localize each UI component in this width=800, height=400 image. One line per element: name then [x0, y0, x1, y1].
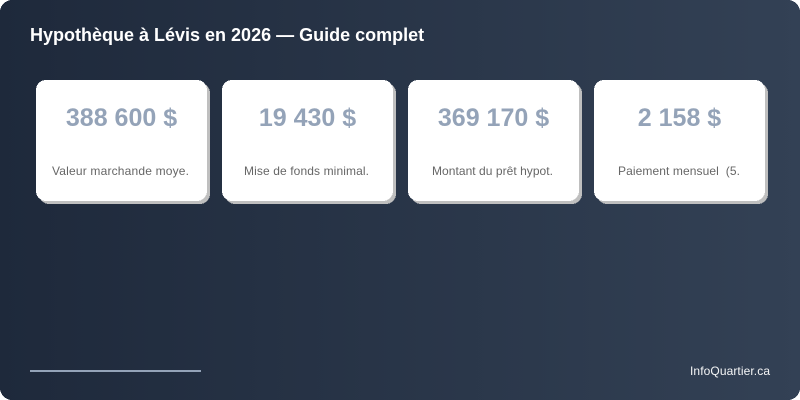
label: valeur marchande: Valeur marchande moye.	[52, 164, 189, 178]
stat: paiement mensuel: 2 158 $	[638, 104, 721, 132]
stat: valeur marchande: 388 600 $	[66, 104, 177, 132]
label: montant du prêt: Montant du prêt hypot.	[432, 164, 553, 178]
panel: mise de fonds	[222, 80, 396, 204]
label: mise de fonds: Mise de fonds minimal.	[244, 164, 369, 178]
panel: valeur marchande	[36, 80, 210, 204]
title: Hypothèque à Lévis en 2026 — Guide complet	[30, 25, 424, 45]
panel: montant du prêt	[408, 80, 582, 204]
panel: paiement mensuel	[594, 80, 768, 204]
footer brand: InfoQuartier.ca	[690, 364, 770, 378]
stat: mise de fonds: 19 430 $	[259, 104, 356, 132]
footer line	[30, 370, 201, 372]
label: paiement mensuel: Paiement mensuel (5.	[618, 164, 740, 178]
stat: montant du prêt: 369 170 $	[438, 104, 549, 132]
